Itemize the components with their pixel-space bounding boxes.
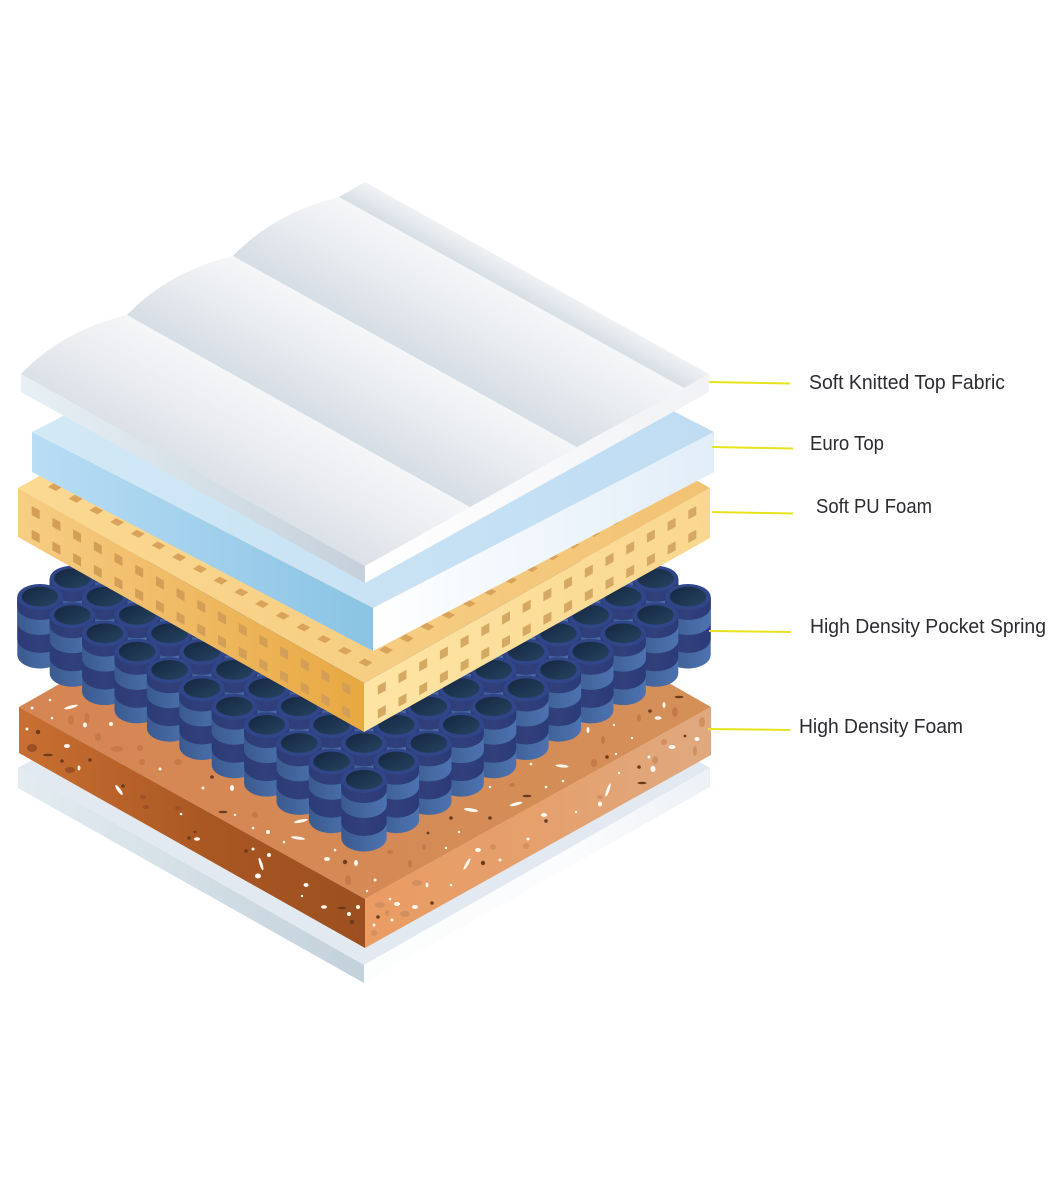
label: high density foam: High Density Foam	[799, 716, 963, 738]
label: high density pocket spring: High Density Pocket Spring	[810, 616, 1046, 638]
leader line: euro top	[712, 447, 793, 448]
layer: high density pocket spring coils	[17, 547, 711, 852]
leader line: top fabric	[709, 382, 790, 384]
layer: high density foam block	[19, 510, 711, 948]
layer: euro top	[32, 256, 714, 651]
label: soft knitted top fabric: Soft Knitted Top Fabric	[809, 372, 1005, 394]
layer: soft PU foam	[18, 293, 710, 732]
layer: bottom base sheet	[18, 569, 710, 983]
leader line: pocket spring	[709, 631, 791, 632]
leader line: PU foam	[712, 512, 793, 514]
leader line: high density foam	[708, 729, 790, 730]
layer: soft knitted top fabric	[21, 182, 709, 583]
label: euro top: Euro Top	[810, 433, 884, 455]
label: soft PU foam: Soft PU Foam	[816, 496, 932, 518]
